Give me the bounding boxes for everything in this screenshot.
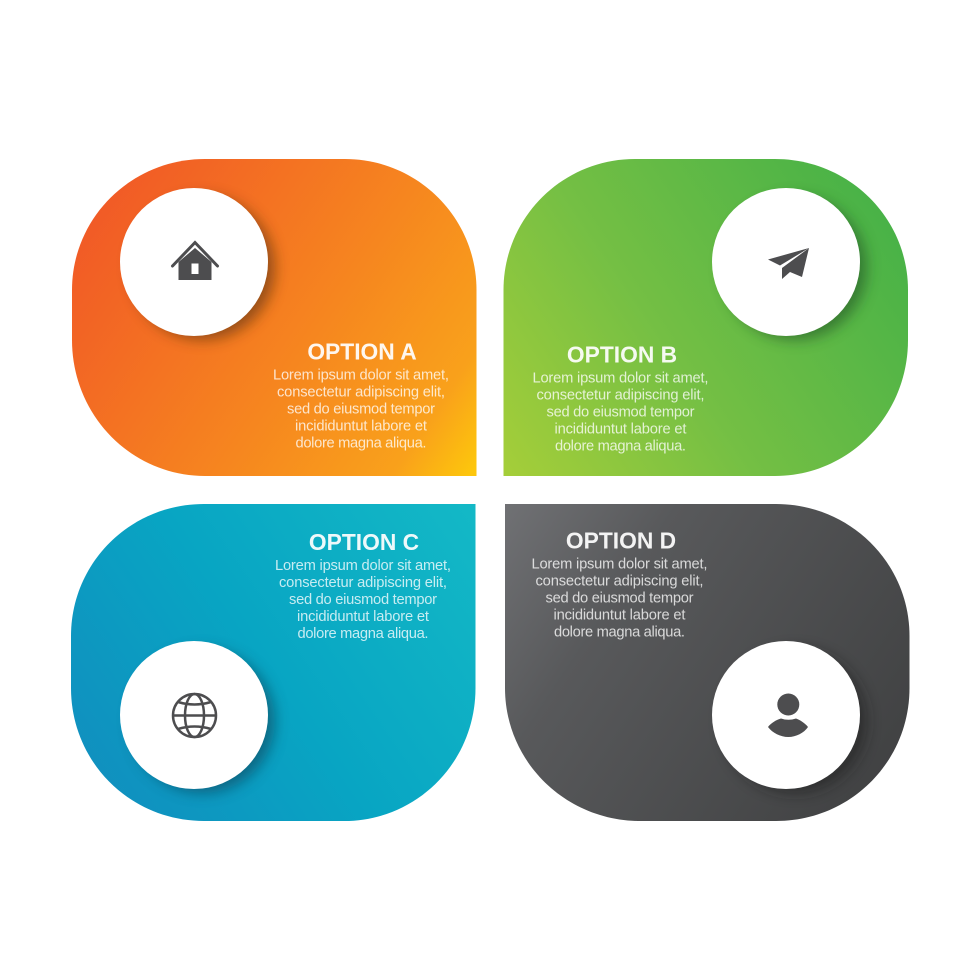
text: option A body: Lorem ipsum dolor sit amet,	[273, 368, 449, 384]
panel B background	[504, 159, 908, 476]
panel: option B	[504, 159, 908, 476]
text: option D body: incididuntut labore et	[554, 608, 686, 624]
panel D background	[505, 504, 910, 821]
circle D	[712, 641, 860, 789]
heading: option A: OPTION A	[307, 338, 417, 364]
heading: option C: OPTION C	[309, 529, 419, 555]
panel A background	[72, 159, 476, 476]
text: option C body: sed do eiusmod tempor	[289, 592, 437, 608]
icon: paper plane	[768, 248, 809, 279]
circle C	[120, 641, 268, 789]
text: option C body: incididuntut labore et	[297, 609, 429, 625]
panel C background	[71, 504, 476, 821]
icon: person	[768, 694, 808, 737]
text: option B body: incididuntut labore et	[554, 422, 686, 438]
text: option D body: sed do eiusmod tempor	[546, 590, 694, 606]
text: option A body: consectetur adipiscing elit,	[277, 384, 445, 400]
text: option D body	[532, 556, 708, 640]
circle shadow D	[723, 649, 867, 793]
text: option B body	[532, 370, 708, 454]
text: option B body: consectetur adipiscing elit,	[536, 388, 704, 404]
circle shadow B	[723, 196, 867, 340]
panel: option D	[505, 504, 910, 821]
circle A	[120, 188, 268, 336]
icon: house	[172, 242, 218, 280]
circle shadow C	[131, 649, 275, 793]
text: option A body: dolore magna aliqua.	[296, 436, 426, 452]
text: option B body: Lorem ipsum dolor sit amet,	[532, 370, 708, 386]
text: option C body: consectetur adipiscing elit,	[279, 575, 447, 591]
text: option D body: consectetur adipiscing elit,	[536, 574, 704, 590]
circle shadow A	[131, 196, 275, 340]
panel: option A	[72, 159, 476, 476]
text: option D body: dolore magna aliqua.	[554, 624, 685, 640]
text: option C body	[275, 558, 451, 642]
text: option A body: incididuntut labore et	[295, 418, 427, 434]
heading: option D: OPTION D	[566, 528, 676, 554]
text: option C body: Lorem ipsum dolor sit amet,	[275, 558, 451, 574]
circle B	[712, 188, 860, 336]
text: option A body	[273, 368, 449, 452]
text: option B body: dolore magna aliqua.	[555, 438, 686, 454]
heading: option B: OPTION B	[567, 342, 677, 368]
panel: option C	[71, 504, 476, 821]
text: option D body: Lorem ipsum dolor sit amet,	[532, 556, 708, 572]
text: option A body: sed do eiusmod tempor	[287, 402, 435, 418]
text: option C body: dolore magna aliqua.	[298, 626, 428, 642]
text: option B body: sed do eiusmod tempor	[546, 404, 695, 420]
icon: globe	[173, 694, 216, 737]
